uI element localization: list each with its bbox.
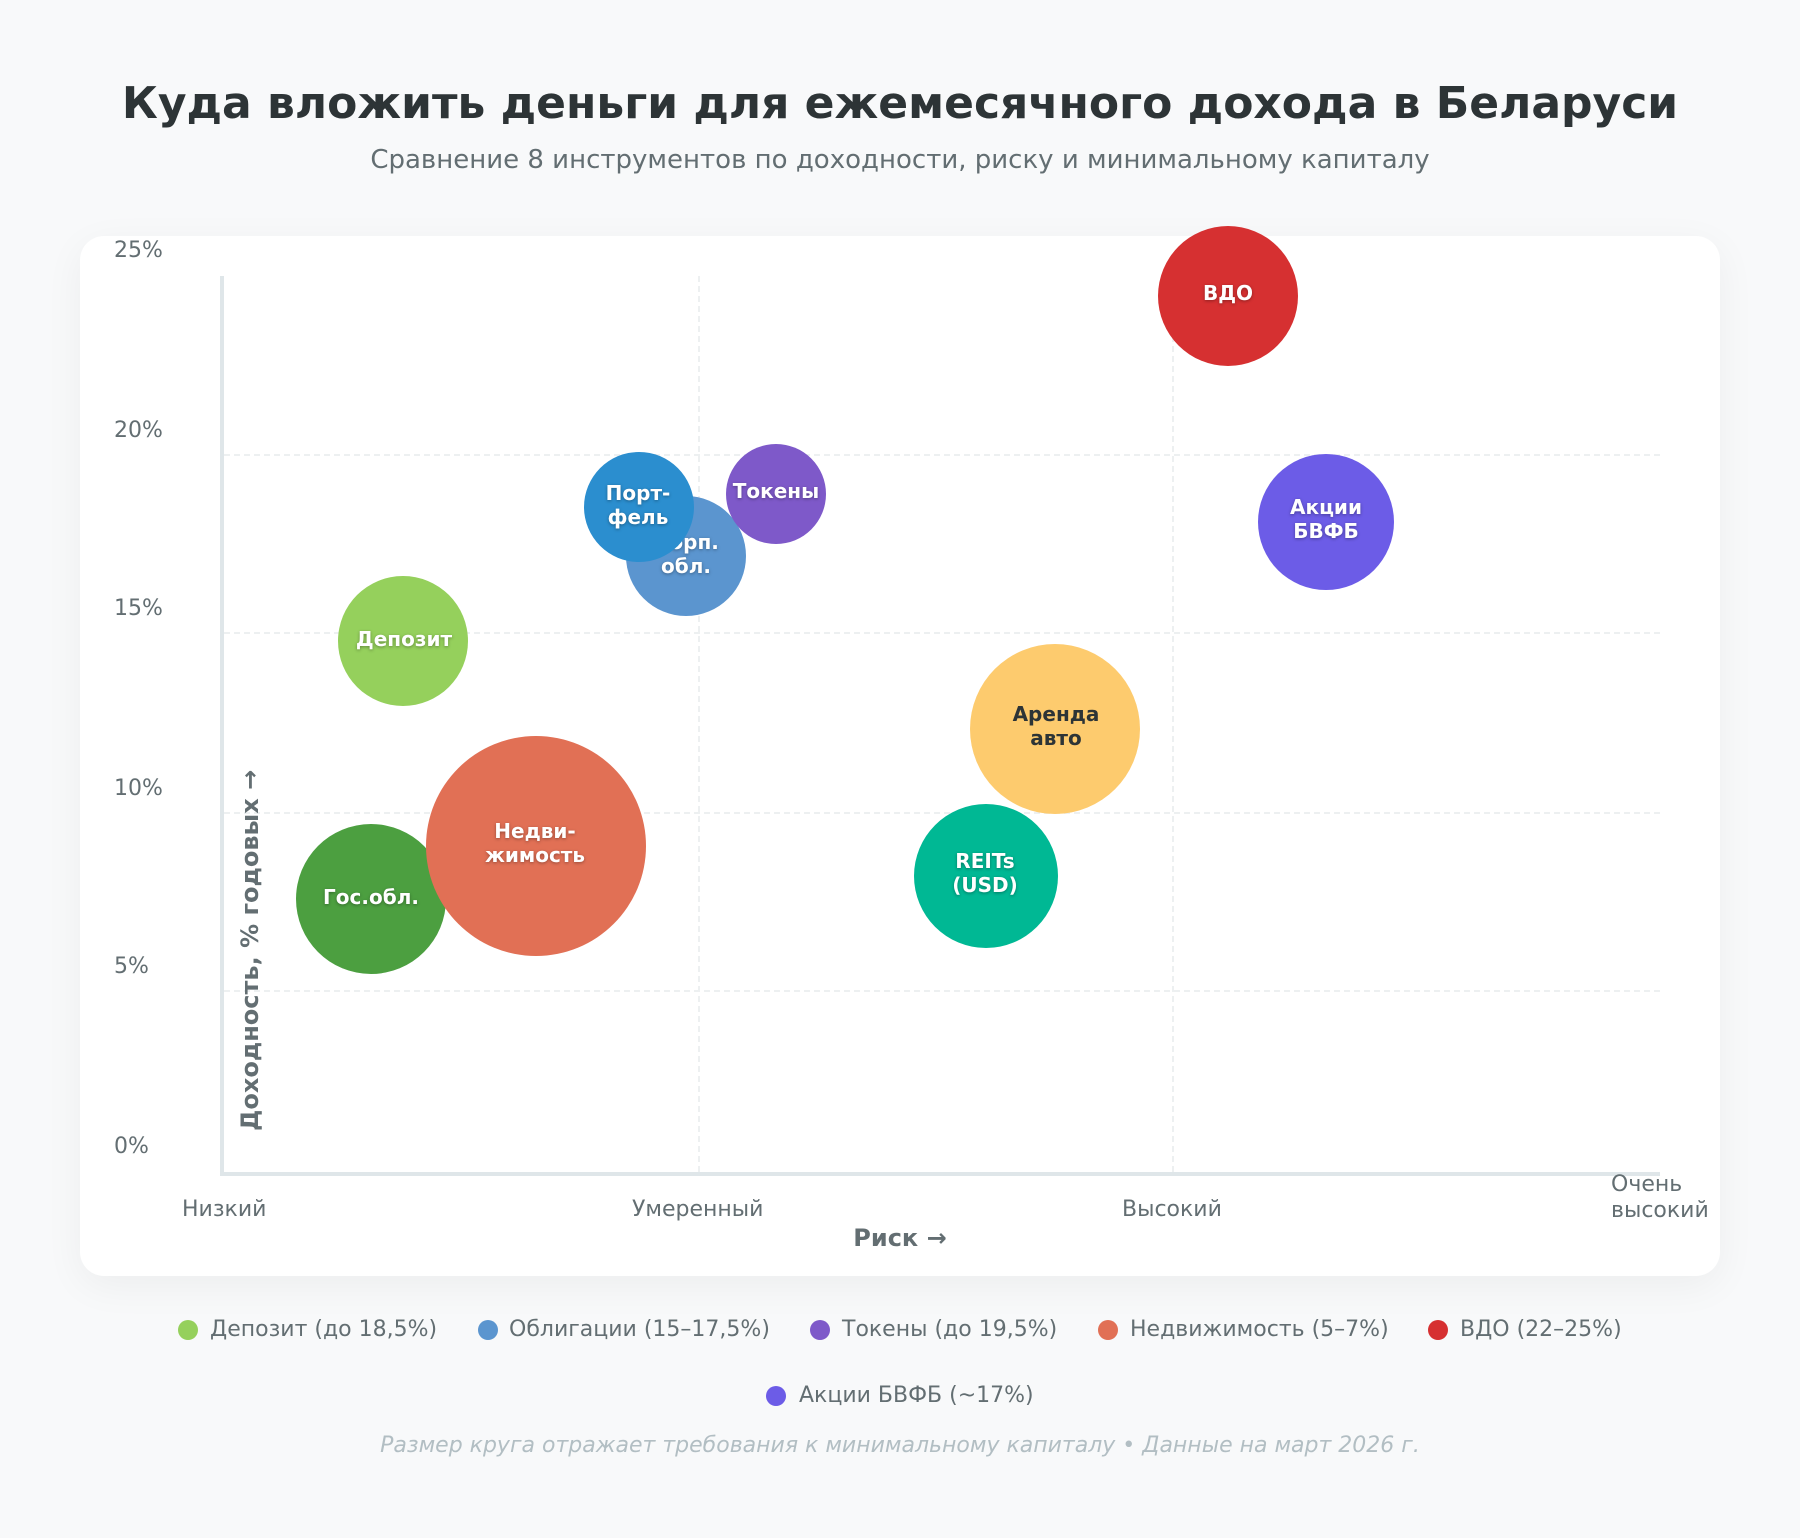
text: Депозит (до 18,5%) [210,1317,437,1342]
x tick: Низкий: Низкий [182,1197,266,1222]
bubble: REITs [914,804,1058,948]
legend: Облигации [478,1317,770,1342]
legend: Токены [810,1317,1057,1342]
text: Облигации (15–17,5%) [509,1317,770,1342]
x tick: Очень высокий: высокий [1611,1198,1709,1223]
bubble: Портфель: Порт- [606,481,670,505]
y axis line [220,276,224,1176]
bubble: Портфель [584,452,694,562]
bubble: Аренда авто: Аренда [1013,702,1099,726]
x axis title: Риск → [853,1224,947,1252]
y tick: 20%: 20% [114,418,163,443]
x tick: Очень высокий [1611,1172,1709,1223]
bubble: Аренда авто: авто [1030,726,1082,750]
bubble: Корп. обл.: обл. [661,554,711,578]
bubble: Недвижимость: Недви- [494,819,576,843]
y tick: 5%: 5% [114,954,149,979]
y tick: 0%: 0% [114,1134,149,1159]
text: Токены (до 19,5%) [842,1317,1057,1342]
bubble: Корп. обл.: Корп. [653,530,719,554]
bubble: ВДО: ВДО [1203,281,1253,305]
y tick: 15%: 15% [114,596,163,621]
y tick: 10%: 10% [114,776,163,801]
legend: Депозит [178,1317,437,1342]
legend: Недвижимость [1098,1317,1389,1342]
x tick: Умеренный: Умеренный [632,1197,763,1222]
bubble: Недвижимость [426,736,646,956]
text: Недвижимость (5–7%) [1130,1317,1389,1342]
footnote: Размер круга отражает требования к минимальному капиталу • Данные на март 2026 г. [380,1433,1420,1458]
text: Акции БВФБ (~17%) [799,1383,1034,1408]
x tick: Очень высокий: Очень [1611,1172,1682,1197]
bubble: Аренда авто [970,644,1140,814]
legend: ВДО [1428,1317,1622,1342]
bubble: Акции БВФБ: БВФБ [1293,519,1359,543]
y tick: 25%: 25% [114,238,163,263]
panel: chart card [80,236,1720,1276]
bubble: ВДО [1158,226,1298,366]
bubble: Депозит [338,576,468,706]
bubble: Токены: Токены [733,479,819,503]
bubble: Гос.обл. [296,824,446,974]
bubble: Акции БВФБ: Акции [1290,495,1362,519]
text: ВДО (22–25%) [1460,1317,1622,1342]
bubble: REITs: (USD) [952,873,1018,897]
bubble: Депозит: Депозит [356,627,452,651]
y axis title: Доходность, % годовых → [236,770,264,1131]
legend: Акции БВФБ [766,1383,1034,1408]
title: Куда вложить деньги для ежемесячного дохода в Беларуси [122,78,1678,129]
bubble: Гос.обл.: Гос.обл. [323,885,419,909]
bubble: REITs: REITs [955,849,1015,873]
bubble: Портфель: фель [608,505,668,529]
bubble: Токены [726,444,826,544]
bubble: Недвижимость: жимость [485,843,585,867]
bubble: Акции БВФБ [1258,454,1394,590]
x axis line [220,1172,1660,1176]
subtitle: Сравнение 8 инструментов по доходности, риску и минимальному капиталу [370,145,1430,175]
x tick: Высокий: Высокий [1122,1197,1222,1222]
bubble: Корп. обл. [626,496,746,616]
